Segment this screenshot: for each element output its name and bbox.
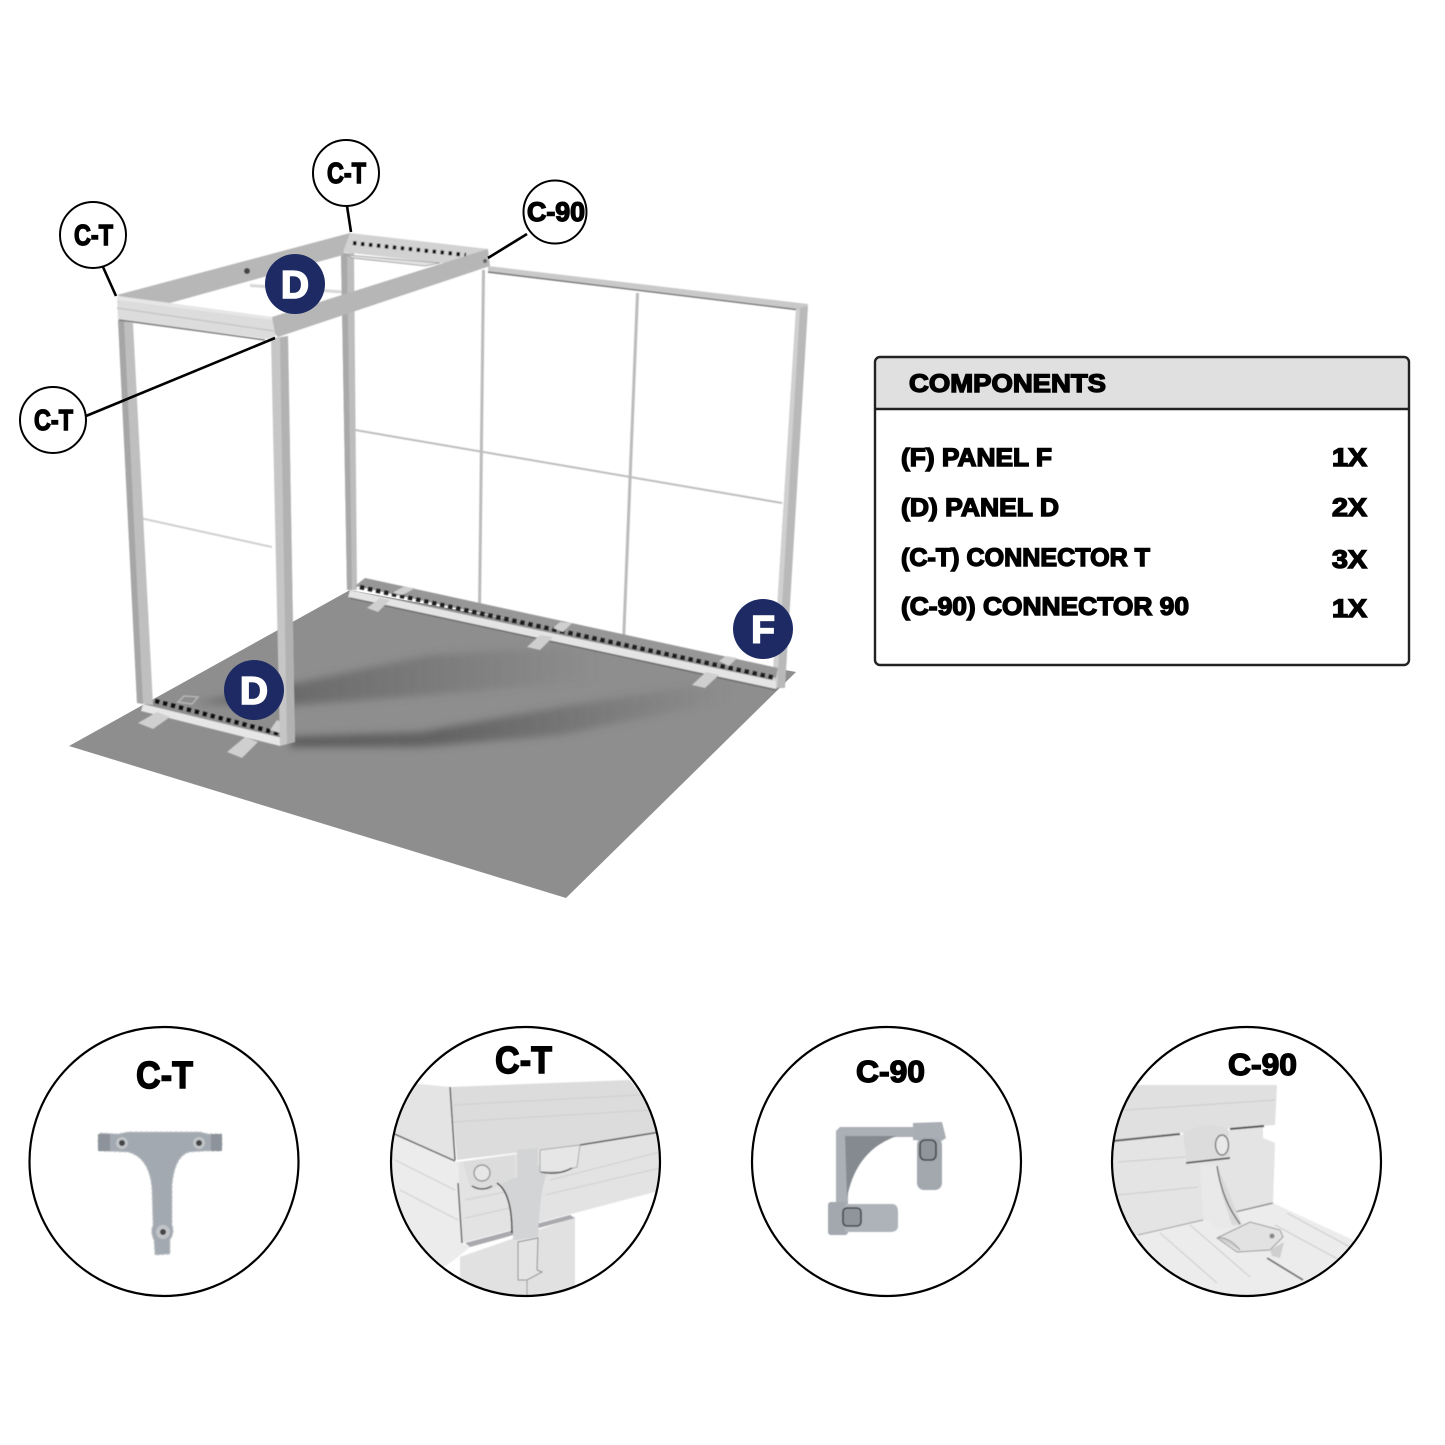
grooves xyxy=(395,1122,658,1220)
row: connector 90: (C-90) CONNECTOR 90 xyxy=(901,593,1189,621)
callout: C-T lower xyxy=(20,338,275,453)
beam faces xyxy=(395,1084,454,1159)
row: connector T xyxy=(901,544,1367,574)
row: panel F: 1X xyxy=(1332,444,1367,472)
row: panel F xyxy=(901,444,1367,472)
callout: C-T lower: C-T xyxy=(34,405,73,437)
far right post xyxy=(772,306,808,688)
row: connector 90 xyxy=(901,593,1367,623)
callout: C-T left: C-T xyxy=(74,220,113,252)
post below beam xyxy=(460,1217,575,1300)
detail circle: C-90 part: C-90 xyxy=(856,1054,925,1089)
installed 90 connector scene xyxy=(1113,1084,1354,1295)
back bottom rail xyxy=(348,578,778,690)
panel: components table xyxy=(875,357,1409,665)
icon: 90 degree connector xyxy=(828,1122,946,1235)
floor with shadows xyxy=(69,590,796,898)
detail circle: C-90 part xyxy=(752,1027,1021,1296)
row: connector 90: 1X xyxy=(1332,595,1367,623)
thin horizontal rods xyxy=(140,284,782,548)
back post xyxy=(341,253,357,590)
installed T connector scene xyxy=(380,1080,670,1300)
callout: C-T left xyxy=(60,202,126,296)
badge: F: F xyxy=(751,609,775,652)
detail circle: C-90 installed xyxy=(1110,1027,1381,1300)
callout: C-T top: C-T xyxy=(327,158,366,190)
row: panel D: 2X xyxy=(1332,494,1367,522)
row: panel F: (F) PANEL F xyxy=(901,444,1052,472)
table header xyxy=(875,357,1409,409)
wall and floor xyxy=(1110,1085,1277,1141)
display frame xyxy=(117,233,808,758)
row: panel D xyxy=(901,494,1367,522)
detail circle: C-T installed xyxy=(380,1027,670,1300)
back rail feet xyxy=(367,587,737,688)
detail circle: C-T part xyxy=(30,1027,298,1296)
badge: D bottom: D xyxy=(240,670,268,713)
back thin vertical rods xyxy=(478,270,639,642)
detail circle: C-T part: C-T xyxy=(136,1055,193,1097)
detail circle: C-90 installed: C-90 xyxy=(1228,1047,1297,1082)
edges xyxy=(450,1087,455,1160)
left top beam xyxy=(117,233,352,303)
icon: T connector xyxy=(98,1132,222,1255)
upper right rail xyxy=(488,266,808,311)
left front post xyxy=(118,320,153,705)
callout: C-T top xyxy=(313,140,379,232)
front rail feet xyxy=(138,696,281,758)
front top beam xyxy=(117,296,276,340)
row: connector T: (C-T) CONNECTOR T xyxy=(901,544,1150,572)
badge: F xyxy=(733,599,793,659)
badge: D bottom xyxy=(224,660,284,720)
right top beam xyxy=(272,249,490,337)
back top beam xyxy=(343,233,488,266)
row: connector T: 3X xyxy=(1332,546,1367,574)
detail circle: C-T installed: C-T xyxy=(495,1040,552,1082)
connector body xyxy=(1200,1165,1242,1230)
row: panel D: (D) PANEL D xyxy=(901,494,1059,522)
badge: D top xyxy=(265,254,325,314)
callout: C-90 xyxy=(488,180,586,258)
connector body xyxy=(500,1148,547,1240)
table header: COMPONENTS xyxy=(909,370,1106,398)
callout: C-90: C-90 xyxy=(527,197,585,227)
right front post xyxy=(271,336,295,746)
badge: D top: D xyxy=(281,264,309,307)
front bottom rail xyxy=(141,698,282,746)
